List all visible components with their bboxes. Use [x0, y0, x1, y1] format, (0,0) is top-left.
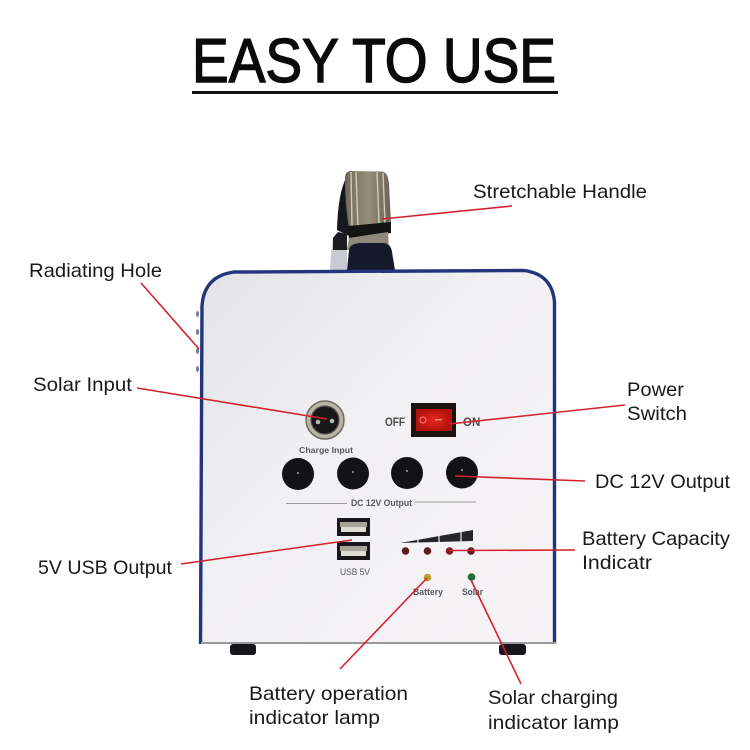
icon: device feet — [230, 644, 526, 655]
icon: power switch: OFF — [385, 417, 405, 429]
icon: DC 12V output sockets: DC 12V Output — [351, 498, 413, 509]
icon: solar lamp: Solar — [462, 587, 483, 598]
label: solar charging indicator lamp: indicator lamp — [488, 712, 619, 734]
label: battery operation indicator lamp: Battery operation — [249, 683, 408, 705]
label: battery operation indicator lamp — [249, 683, 408, 729]
label: stretchable handle: Stretchable Handle — [473, 181, 647, 203]
label: battery capacity indicator — [582, 528, 730, 574]
icon: battery lamp: Battery — [413, 587, 444, 598]
arrows: red leader lines — [137, 206, 625, 684]
icon: USB ports: USB 5V — [340, 567, 371, 578]
icon: solar lamp — [462, 573, 483, 598]
icon: DC 12V output sockets — [282, 456, 478, 509]
icon: charge input socket — [299, 401, 353, 455]
icon: radiating holes — [196, 311, 199, 372]
icon: power switch — [385, 403, 480, 437]
icon: USB ports — [337, 518, 371, 578]
icon: battery capacity indicator — [400, 530, 475, 555]
label: power switch — [627, 379, 687, 425]
title: EASY TO USE — [192, 27, 556, 96]
label: radiating hole: Radiating Hole — [29, 260, 162, 282]
icon: charge input socket: Charge Input — [299, 446, 353, 455]
icon: battery lamp — [413, 574, 444, 598]
label: battery operation indicator lamp: indicator lamp — [249, 707, 380, 729]
label: 5V USB output: 5V USB Output — [38, 557, 173, 579]
icon: power switch: ON — [463, 417, 480, 429]
label: solar input: Solar Input — [33, 374, 133, 396]
panel: device body — [200, 270, 556, 644]
label: DC 12V output: DC 12V Output — [595, 471, 731, 493]
label: power switch: Switch — [627, 403, 687, 425]
label: power switch: Power — [627, 379, 685, 401]
label: solar charging indicator lamp: Solar charging — [488, 687, 618, 709]
label: battery capacity indicator: Battery Capacity — [582, 528, 730, 550]
label: solar charging indicator lamp — [488, 687, 619, 734]
icon: stretchable handle — [330, 171, 395, 270]
label: battery capacity indicator: Indicatr — [582, 552, 653, 574]
